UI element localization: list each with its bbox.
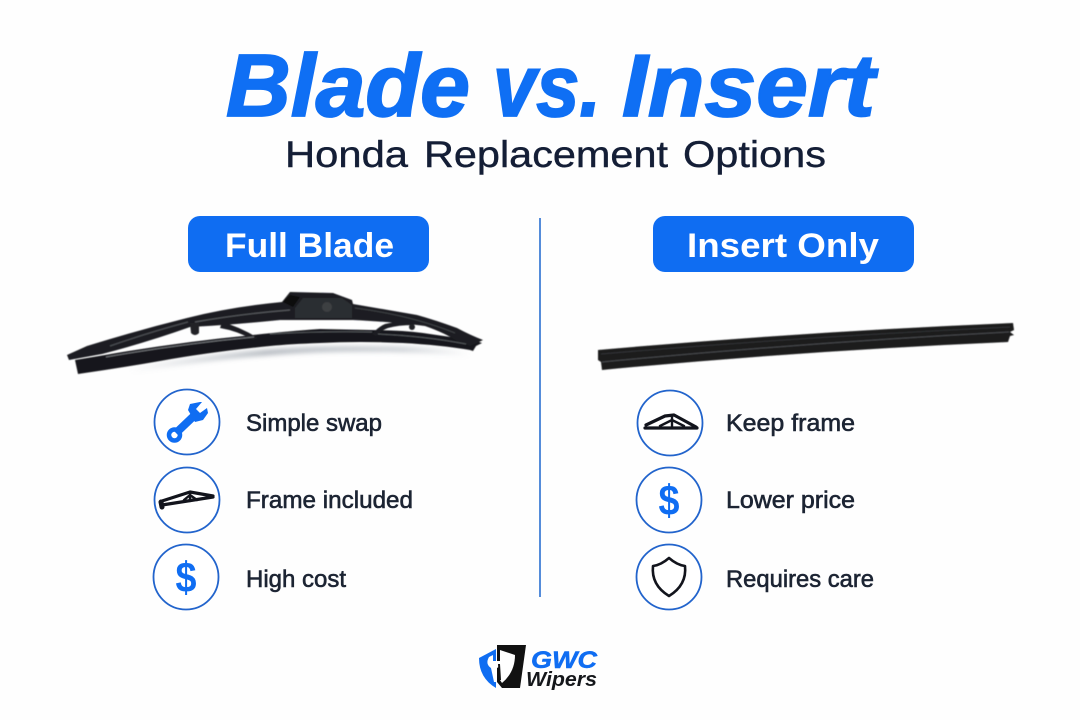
upper arm [67,292,483,360]
item: frame included [154,468,413,532]
heading: insert only [653,216,914,272]
subtitle: Honda [285,134,408,175]
icon: shield [653,558,685,596]
title: vs. [493,36,601,135]
item: keep frame [638,390,855,456]
struts [220,322,258,340]
highlights [110,322,188,346]
item: frame included: Frame included [246,487,413,514]
item: requires care [636,544,874,610]
heading: insert only: Insert Only [687,227,879,265]
title: Blade [226,36,470,135]
icon: wiper frame [645,415,697,428]
lugs [190,323,199,335]
panel: insert only [598,216,1014,610]
subtitle: Replacement [424,134,669,175]
divider [539,218,541,597]
icon: wiper frame [161,492,213,507]
icon: dollar sign: $ [658,477,680,525]
logo: GWC Wipers [479,645,598,691]
item: lower price: Lower price [726,487,855,514]
subtitle: Options [683,134,826,175]
illustration: rubber insert [598,323,1014,370]
lower blade [75,329,482,374]
title: Insert [622,36,879,135]
heading: full blade: Full Blade [225,227,394,265]
item: simple swap: Simple swap [246,410,382,437]
mount plate [295,298,352,318]
subtitle [285,134,826,175]
item: high cost [154,544,346,610]
icon: dollar sign: $ [176,554,197,602]
heading: full blade [188,216,429,272]
item: lower price [636,468,855,532]
title [226,36,879,135]
item: simple swap [154,390,382,454]
icon: wrench [169,402,208,440]
item: keep frame: Keep frame [726,410,855,437]
logo text: GWC [531,647,598,674]
logo text: wipers: Wipers [526,669,597,691]
icon: shield with wrench [479,645,526,688]
illustration: full wiper blade [67,292,483,374]
item: high cost: High cost [246,566,346,593]
panel: full blade [67,216,483,610]
item: requires care: Requires care [726,566,874,593]
